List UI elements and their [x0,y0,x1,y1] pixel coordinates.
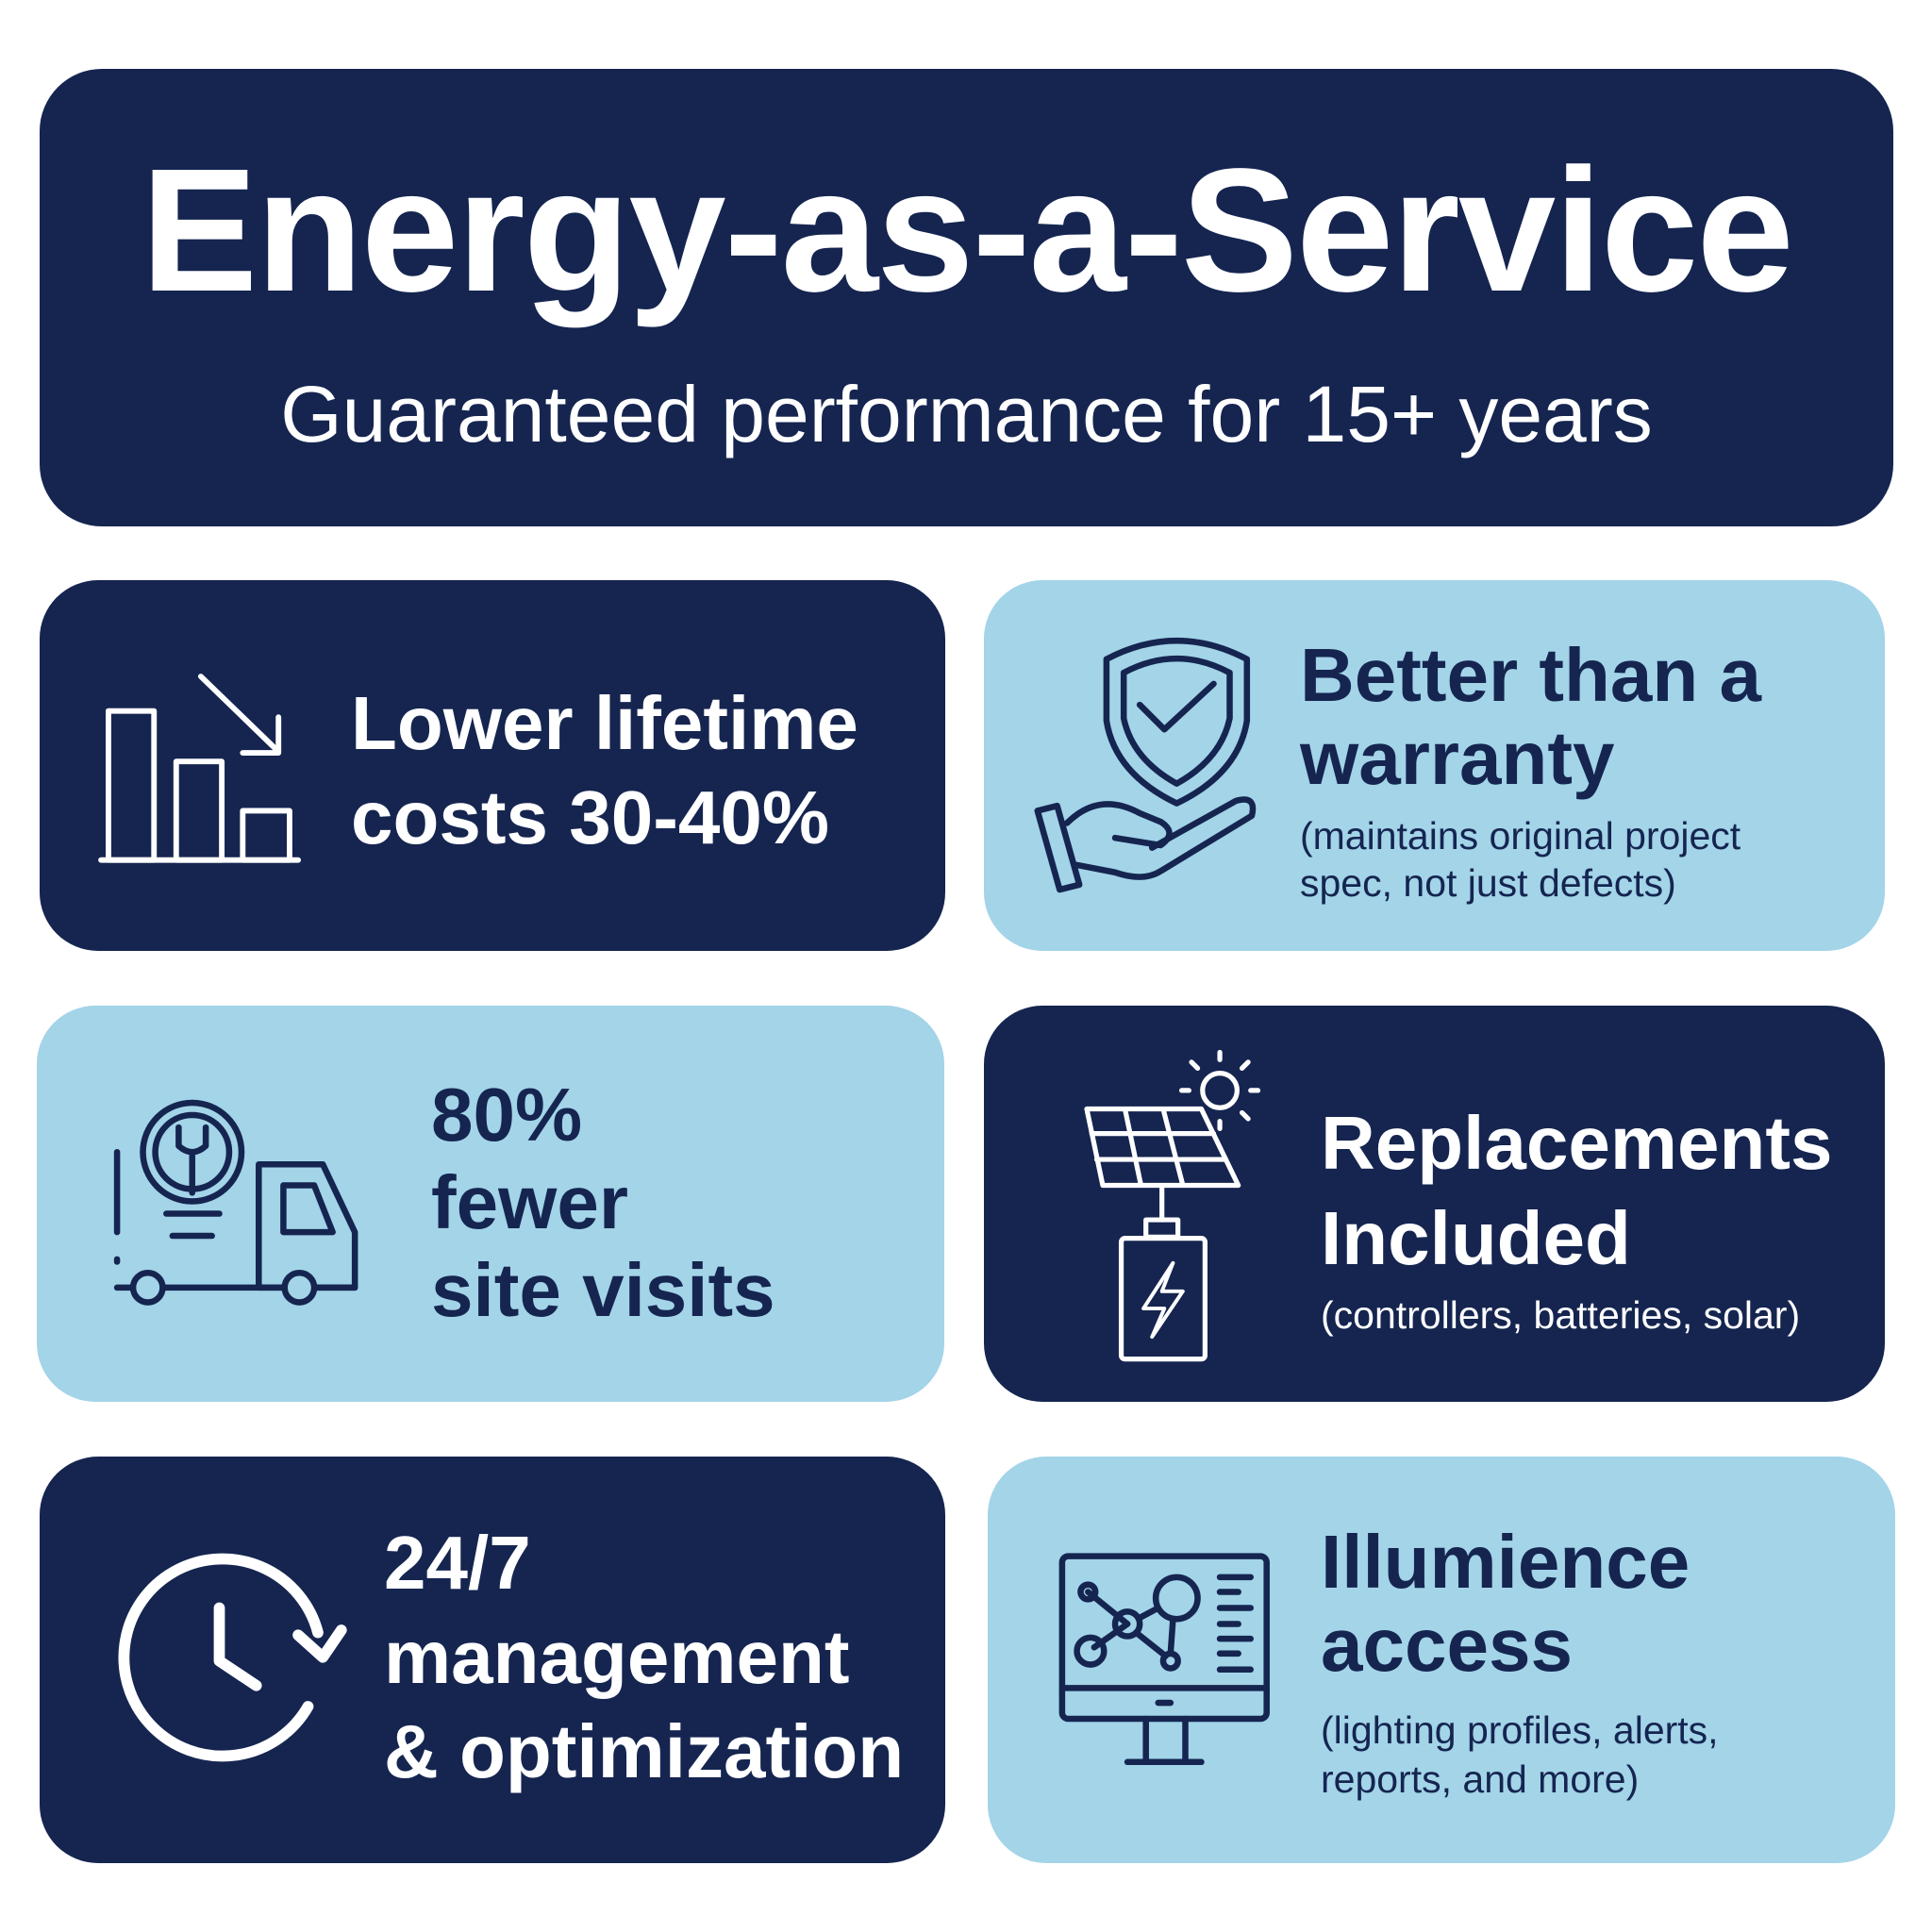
text: warranty detail [1300,814,1740,905]
heading: site visits: fewer [431,1160,628,1244]
panel: title [40,69,1893,526]
heading: management: 24/7 [384,1521,531,1605]
heading: illumience: access [1321,1603,1573,1687]
heading: lower costs: Lower lifetime [351,681,858,765]
icon: service truck [117,1103,355,1303]
icon: monitor analytics [1062,1557,1267,1762]
heading: site visits: 80% [431,1073,582,1157]
heading: management [384,1521,904,1793]
panel: fewer site visits [37,1006,944,1402]
heading: site visits: site visits [431,1248,775,1332]
text: illumience detail: (lighting profiles, alerts, [1321,1708,1719,1752]
heading: replacements [1321,1101,1832,1280]
panel: illumience access [988,1457,1895,1863]
text: illumience detail [1321,1708,1719,1801]
subtitle: Guaranteed performance for 15+ years [280,370,1653,458]
icon: clock with arrow [124,1559,341,1757]
heading: site visits [431,1073,775,1332]
heading: warranty: Better than a [1300,633,1761,717]
heading: warranty [1300,633,1762,800]
heading: illumience: Illumience [1321,1520,1690,1604]
heading: lower costs [351,681,858,859]
text: warranty detail: (maintains original project [1300,814,1740,858]
panel: better than a warranty [984,580,1885,951]
text: replacements detail: (controllers, batteries, solar) [1321,1293,1800,1337]
icon: bar chart down [101,676,298,860]
heading: illumience [1321,1520,1690,1687]
text: warranty detail: spec, not just defects) [1300,861,1676,905]
panel: replacements included [984,1006,1885,1402]
heading: management: & optimization [384,1709,904,1793]
heading: replacements: Replacements [1321,1101,1832,1185]
heading: lower costs: costs 30-40% [351,775,829,859]
icon: shield in hand [1038,641,1253,890]
icon: solar battery [1087,1052,1258,1359]
heading: replacements: Included [1321,1196,1631,1280]
panel: lower lifetime costs [40,580,945,951]
title: Energy-as-a-Service [141,133,1792,328]
text: illumience detail: reports, and more) [1321,1757,1639,1801]
heading: management: management [384,1615,849,1699]
heading: warranty: warranty [1300,716,1614,800]
panel: 24/7 management [40,1457,945,1863]
